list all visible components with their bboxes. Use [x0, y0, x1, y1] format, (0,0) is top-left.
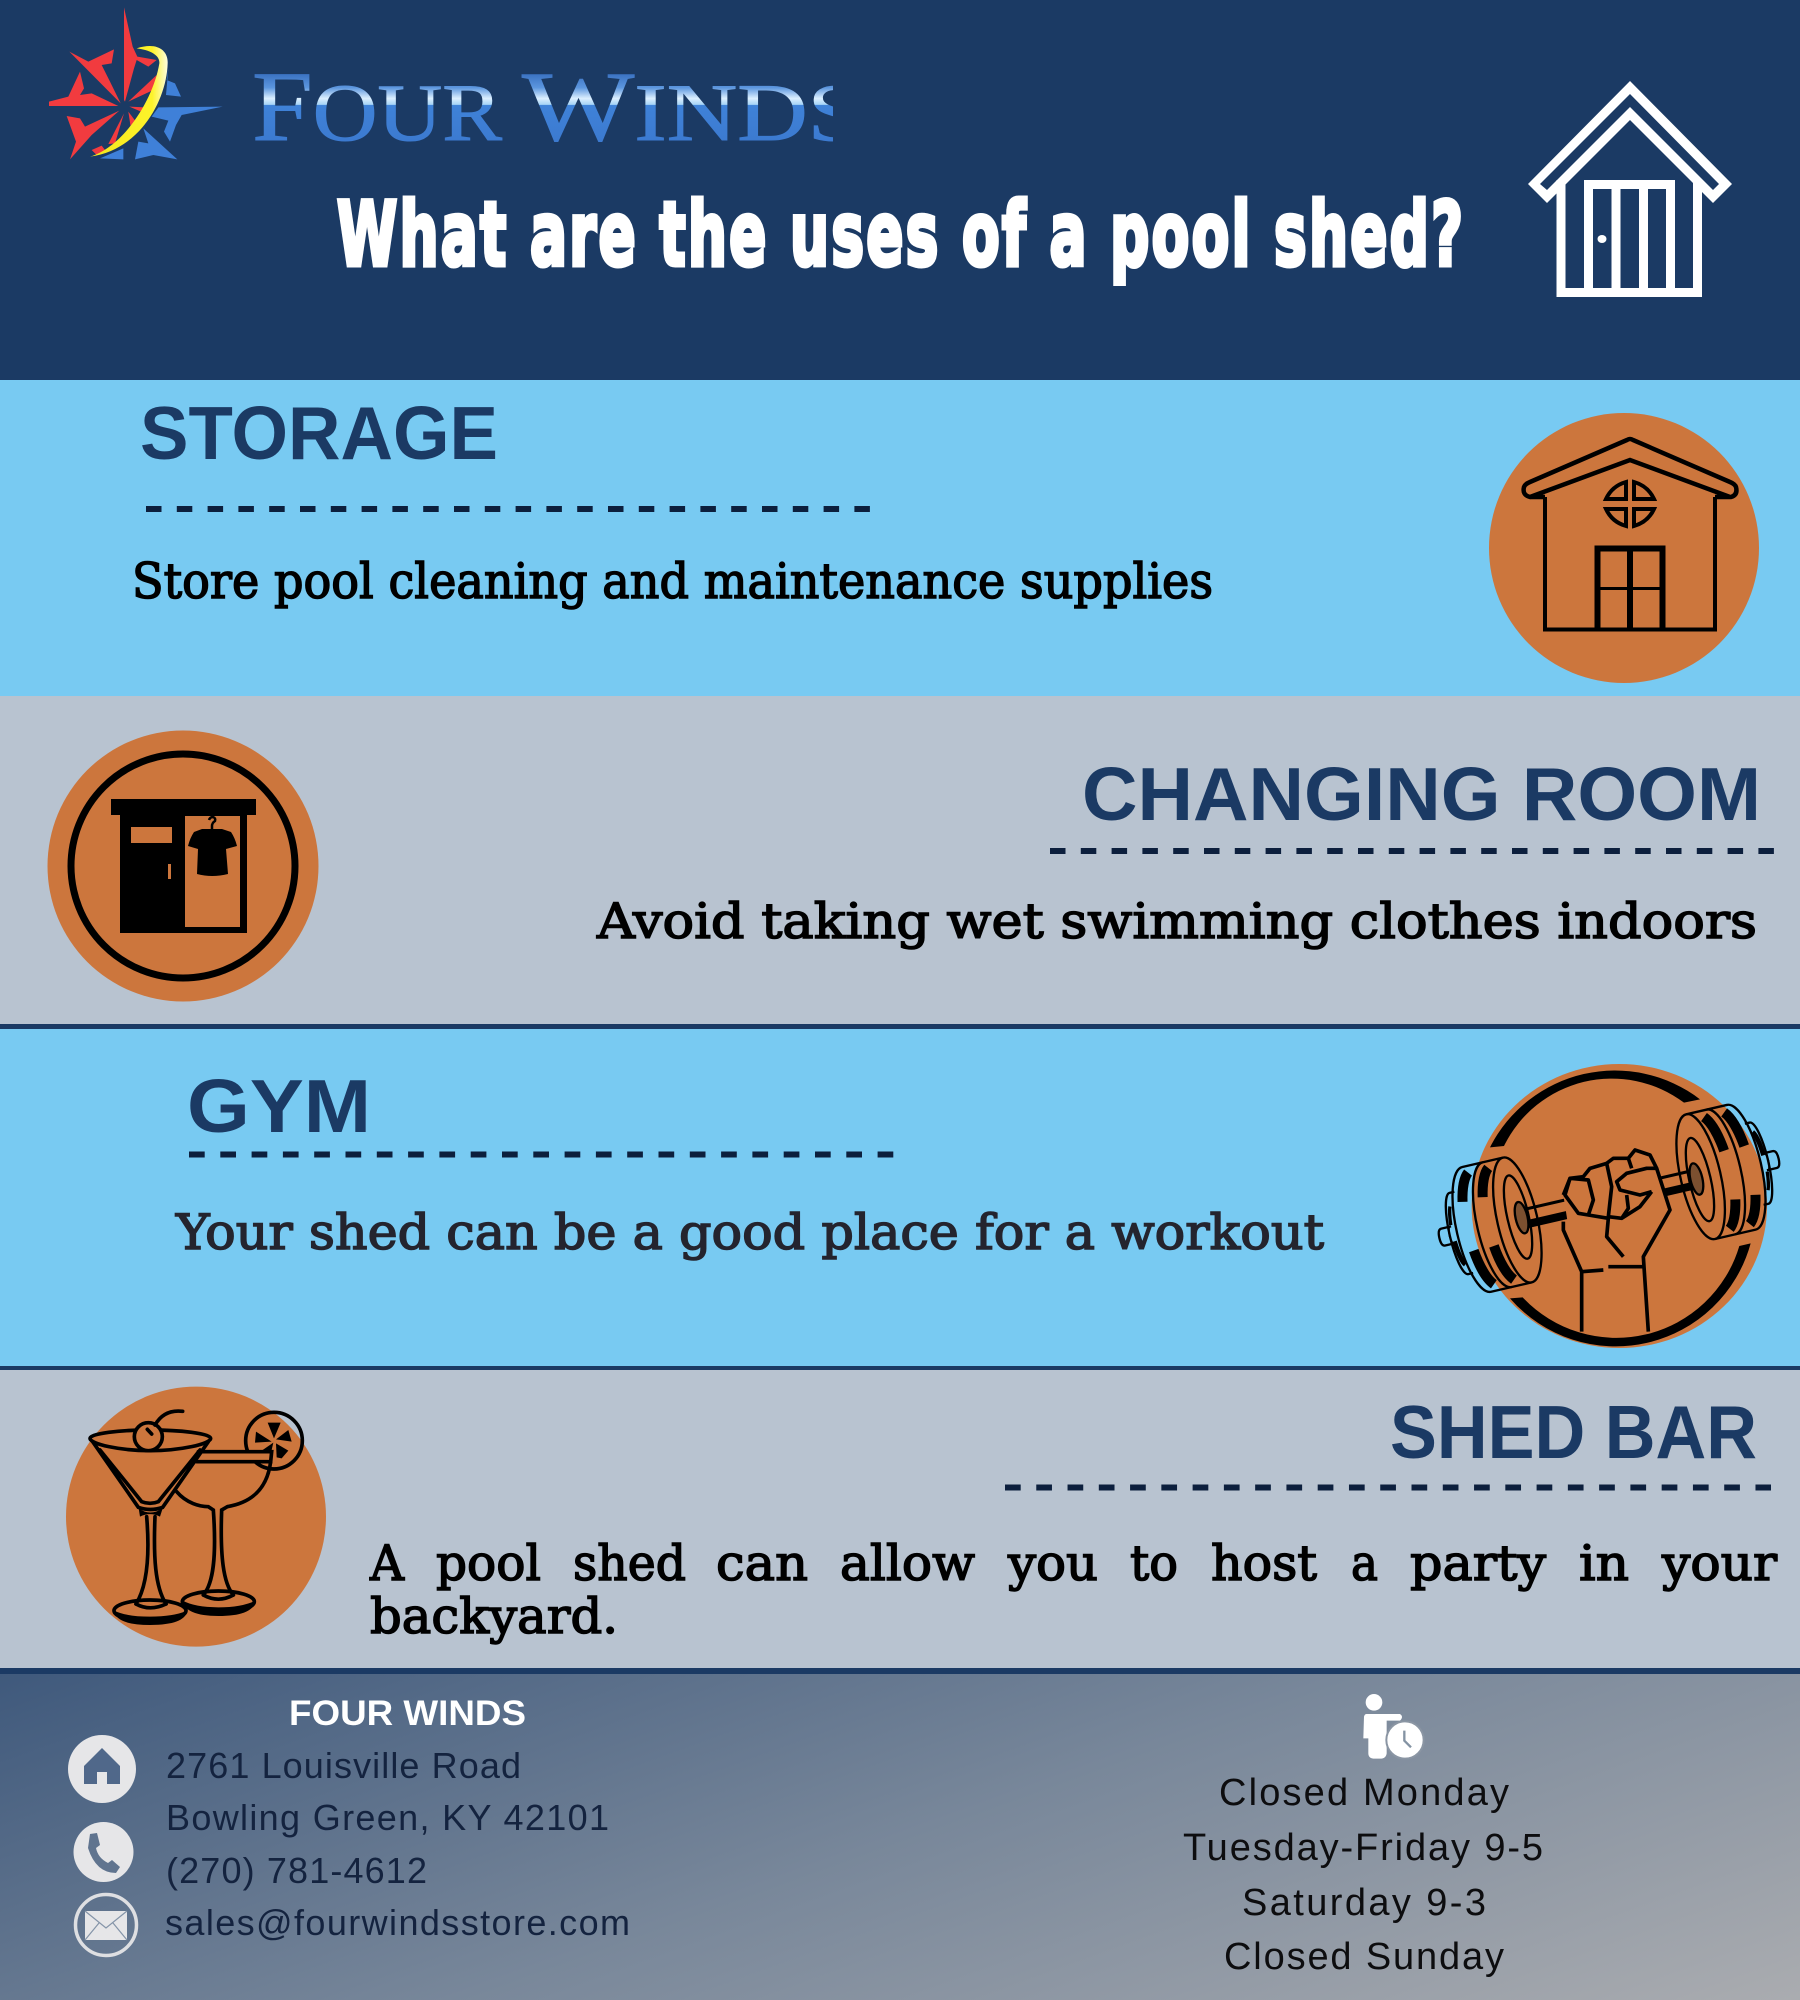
icon: Four Winds compass logo: [49, 7, 223, 159]
opening hours: Saturday 9-3: [1242, 1882, 1486, 1924]
icon: person with clock: [1363, 1694, 1424, 1759]
heading: changing room: CHANGING ROOM: [1082, 752, 1761, 836]
panel: footer: [0, 1674, 1800, 2000]
text: storage description: Store pool cleaning and maintenance supplies: [132, 553, 1213, 610]
text: shed bar description: pool: [436, 1535, 541, 1592]
logo wordmark: [254, 74, 833, 142]
text: shed bar description: to: [1130, 1535, 1178, 1592]
text: gym description: Your shed can be a good place for a workout: [175, 1204, 1324, 1261]
icon: dumbbell badge: [1425, 1064, 1793, 1348]
icon: phone: [74, 1822, 134, 1882]
text: shed bar description: can: [716, 1535, 808, 1592]
email: sales@fourwindsstore.com: [165, 1902, 630, 1943]
phone number: (270) 781-4612: [166, 1850, 427, 1891]
text: changing room description: Avoid taking wet swimming clothes indoors: [596, 893, 1757, 950]
text: shed bar description: backyard.: [370, 1588, 618, 1645]
text: shed bar description: a: [1351, 1535, 1378, 1592]
heading: storage: STORAGE: [140, 391, 498, 475]
text: shed bar description: you: [1007, 1535, 1098, 1592]
panel: storage: [0, 380, 1800, 696]
text: shed bar description: host: [1211, 1535, 1317, 1592]
opening hours: Closed Monday: [1219, 1772, 1509, 1814]
heading: gym: GYM: [187, 1064, 371, 1148]
text: shed bar description: in: [1579, 1535, 1629, 1592]
icon: white shed: [1528, 81, 1732, 292]
icon: home: [68, 1735, 136, 1803]
text: shed bar description: your: [1661, 1535, 1778, 1592]
footer heading: FOUR WINDS: [289, 1694, 526, 1733]
address line 1: 2761 Louisville Road: [166, 1745, 521, 1786]
panel: gym: [0, 1029, 1800, 1370]
icon: changing room badge: [48, 730, 318, 1002]
text: shed bar description: allow: [840, 1535, 975, 1592]
text: shed bar description: A: [369, 1535, 405, 1592]
text: shed bar description: shed: [573, 1535, 686, 1592]
opening hours: [1183, 1772, 1543, 1978]
icon: storage house badge: [1489, 413, 1759, 683]
opening hours: Tuesday-Friday 9-5: [1183, 1827, 1543, 1869]
address line 2: Bowling Green, KY 42101: [166, 1797, 609, 1838]
text: shed bar description: party: [1410, 1535, 1546, 1592]
panel: header: [49, 8, 1732, 297]
panel: changing room: [0, 696, 1800, 1029]
heading: shed bar: SHED BAR: [1390, 1390, 1757, 1474]
logo wordmark: WINDS: [522, 51, 862, 162]
logo wordmark: FOUR: [252, 51, 502, 162]
icon: cocktails badge: [66, 1387, 326, 1647]
opening hours: Closed Sunday: [1224, 1936, 1504, 1978]
title: What are the uses of a pool shed?: [337, 184, 1463, 287]
panel: shed bar: [0, 1370, 1800, 1674]
icon: mail: [76, 1894, 136, 1956]
text: shed bar description: [369, 1535, 1778, 1645]
